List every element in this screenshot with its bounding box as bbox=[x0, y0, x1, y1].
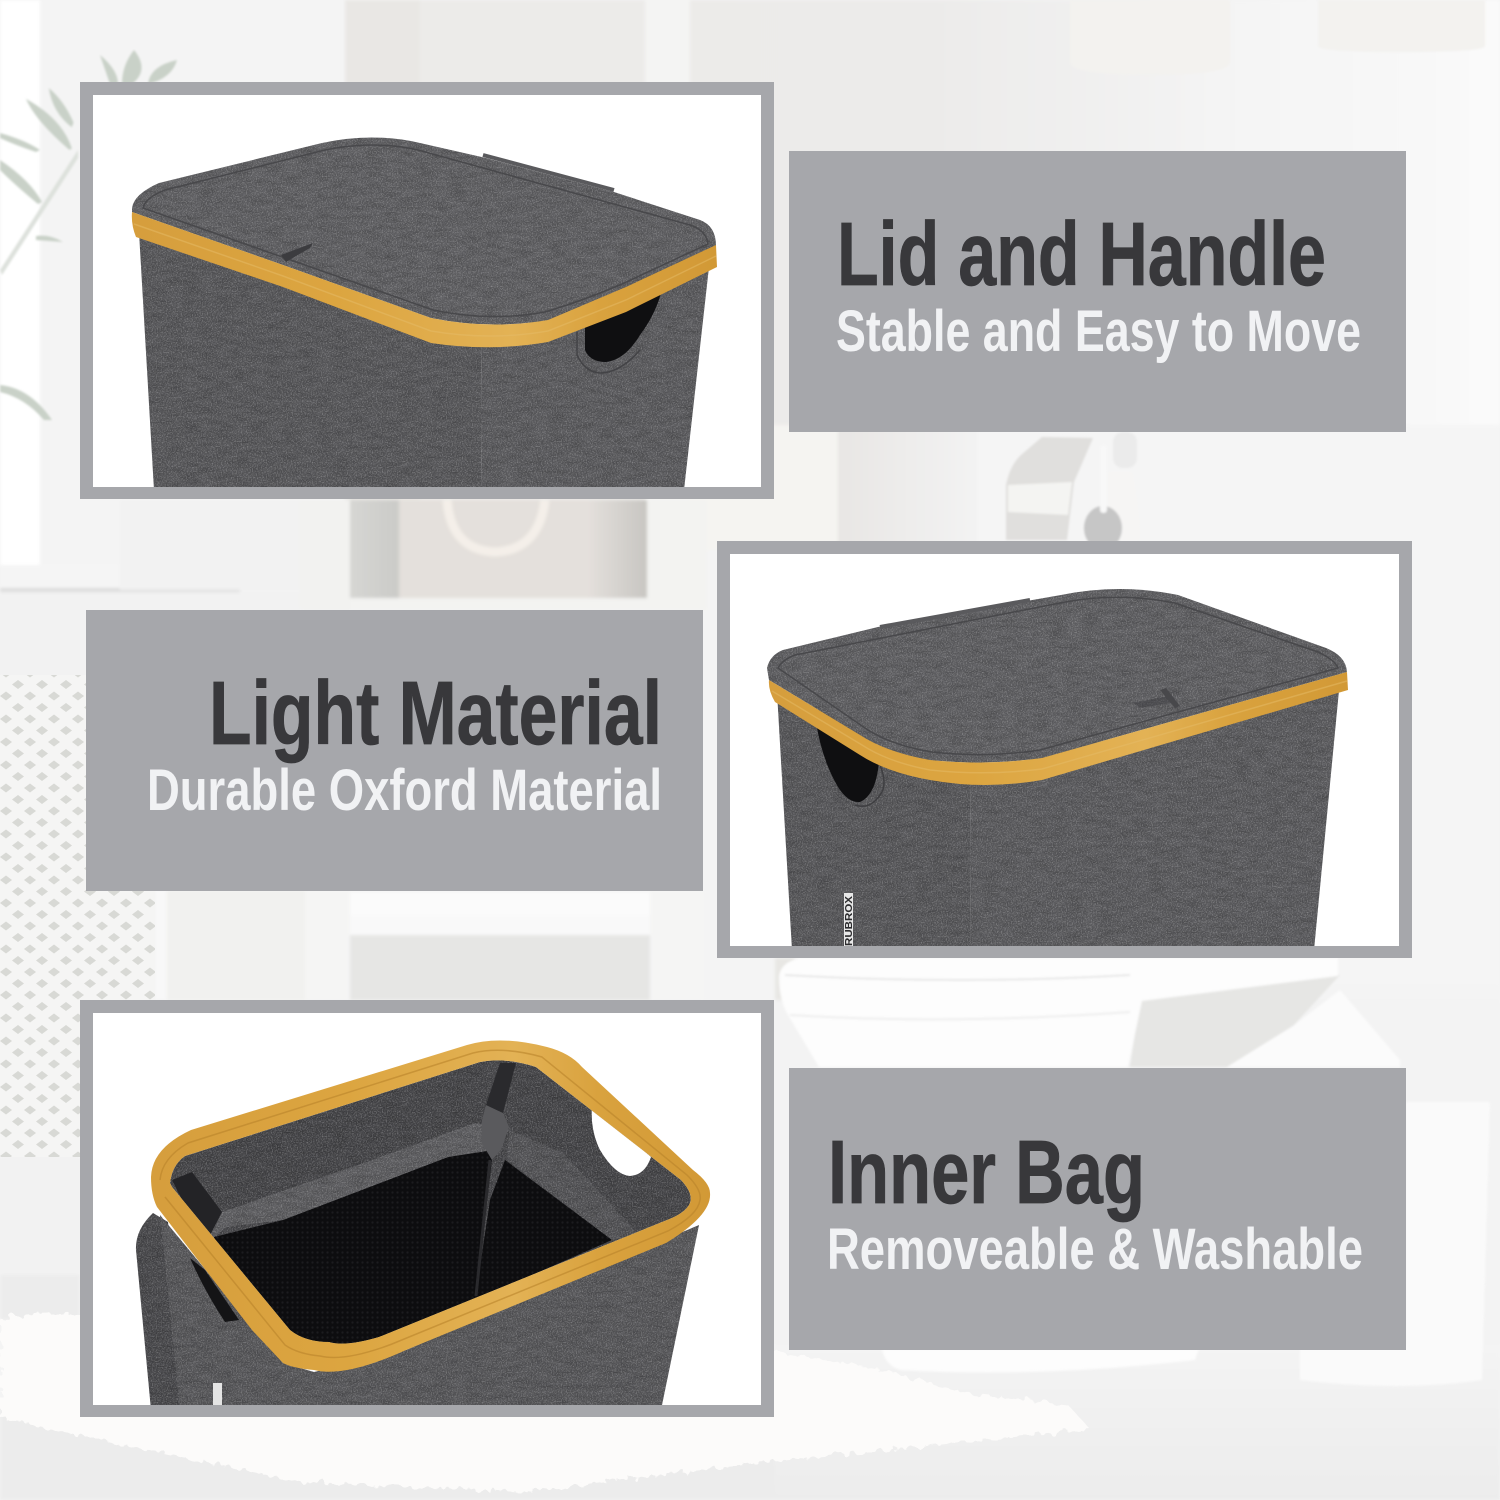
heading: lid and handle: Lid and Handle bbox=[837, 205, 1326, 305]
heading: light material: Light Material bbox=[209, 664, 662, 764]
bag interior bbox=[160, 1050, 700, 1350]
bath rug bbox=[0, 1314, 1090, 1492]
subheading: removeable and washable: Removeable & Washable bbox=[827, 1217, 1363, 1282]
subheading: stable and easy: Stable and Easy to Move bbox=[836, 299, 1361, 364]
toilet bbox=[779, 958, 1400, 1372]
lamp shades bbox=[1070, 0, 1485, 75]
hamper: fabric side view bbox=[767, 589, 1348, 953]
plant bbox=[0, 50, 177, 420]
panel: inner bag photo bbox=[80, 1000, 774, 1417]
waste bin bbox=[1300, 1102, 1490, 1386]
panel: lid and handle photo bbox=[80, 82, 774, 499]
panel: light material caption bbox=[86, 610, 703, 891]
panel: lid and handle caption bbox=[789, 151, 1406, 432]
toilet roll holder bbox=[1006, 432, 1140, 550]
subheading: durable oxford: Durable Oxford Material bbox=[147, 758, 662, 823]
radiator lattice bbox=[0, 675, 155, 1157]
hamper: fabric side view: RUBROX bbox=[844, 896, 855, 946]
hamper: closed with handle cut-out bbox=[132, 138, 717, 490]
panel: inner bag caption bbox=[789, 1068, 1406, 1350]
panel: light material photo bbox=[717, 541, 1412, 958]
hamper: open with inner mesh bag bbox=[136, 1040, 710, 1410]
heading: inner bag: Inner Bag bbox=[828, 1123, 1145, 1223]
